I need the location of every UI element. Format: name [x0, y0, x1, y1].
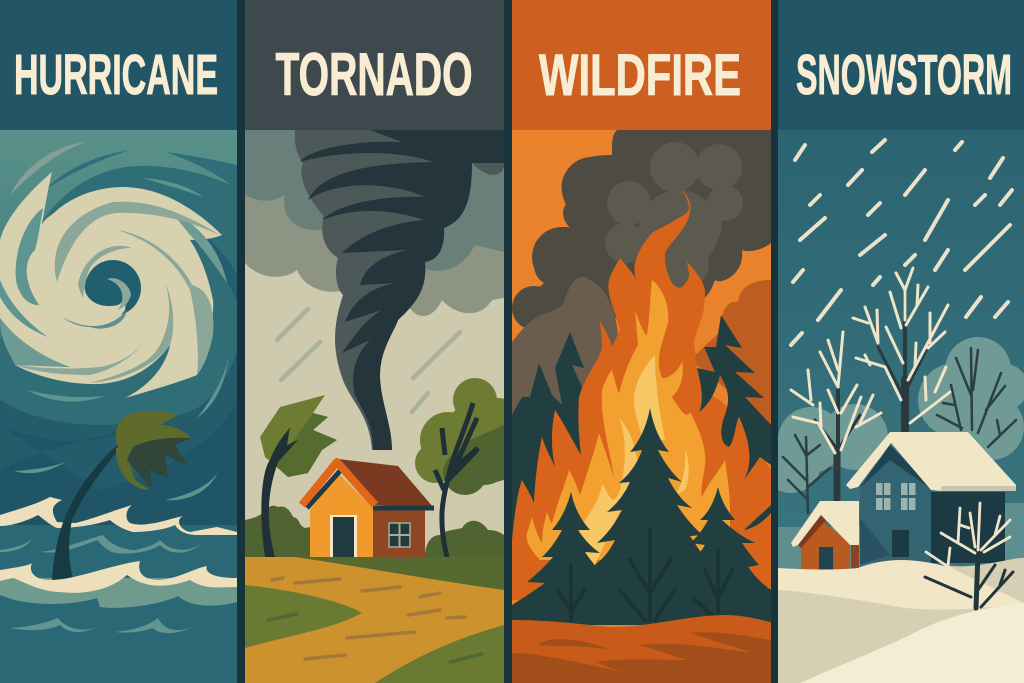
hurricane spiral	[0, 172, 227, 398]
light smoke cloud	[605, 142, 743, 290]
near storm cloud	[245, 130, 504, 271]
panel: tornado	[245, 0, 523, 683]
wildfire title: WILDFIRE	[539, 43, 741, 108]
palm tree	[52, 411, 192, 581]
tornado scene	[245, 130, 523, 683]
snowstorm scene	[761, 130, 1024, 683]
tornado header	[245, 0, 504, 130]
panel: wildfire	[512, 0, 771, 683]
panel: snowstorm	[761, 0, 1024, 683]
tornado title: TORNADO	[276, 41, 472, 108]
tree trunk shadows	[558, 530, 732, 620]
hurricane dark cloud bands	[0, 142, 237, 535]
right brown smoke	[690, 280, 771, 430]
snow streaks	[788, 138, 1014, 348]
ground and path	[245, 557, 504, 683]
ground shadows	[512, 632, 771, 683]
dark background trees	[783, 348, 1016, 513]
dark smoke cloud	[512, 130, 771, 330]
hurricane header	[0, 0, 237, 130]
hurricane title: HURRICANE	[14, 43, 218, 107]
snow shade	[778, 558, 1024, 683]
tornado funnel	[295, 130, 504, 450]
snowstorm header	[778, 0, 1024, 130]
panel: hurricane	[0, 0, 237, 683]
wildfire header	[512, 0, 771, 130]
bushes	[245, 506, 504, 557]
large house	[846, 432, 1016, 565]
house	[302, 459, 434, 557]
sea	[0, 497, 237, 634]
ground	[512, 615, 771, 672]
snow foreground hill	[800, 603, 1024, 683]
snow ground	[778, 558, 1024, 683]
hurricane scene	[0, 130, 237, 683]
flames	[512, 188, 771, 600]
wildfire scene	[512, 130, 771, 683]
rain streaks	[277, 309, 460, 412]
front wave	[0, 561, 237, 593]
right tree	[415, 378, 504, 557]
bare tree snowy branches	[791, 268, 950, 453]
front pine trees	[512, 315, 771, 625]
back pine trees	[512, 332, 584, 540]
brown smoke lower left	[512, 277, 618, 415]
bare tree trunks	[815, 293, 930, 502]
foreground bare tree	[925, 503, 1013, 608]
background tree masses	[761, 337, 1024, 493]
distant bands	[778, 503, 1024, 575]
far storm cloud	[245, 195, 504, 316]
small house	[791, 501, 859, 572]
left tree	[260, 395, 337, 557]
